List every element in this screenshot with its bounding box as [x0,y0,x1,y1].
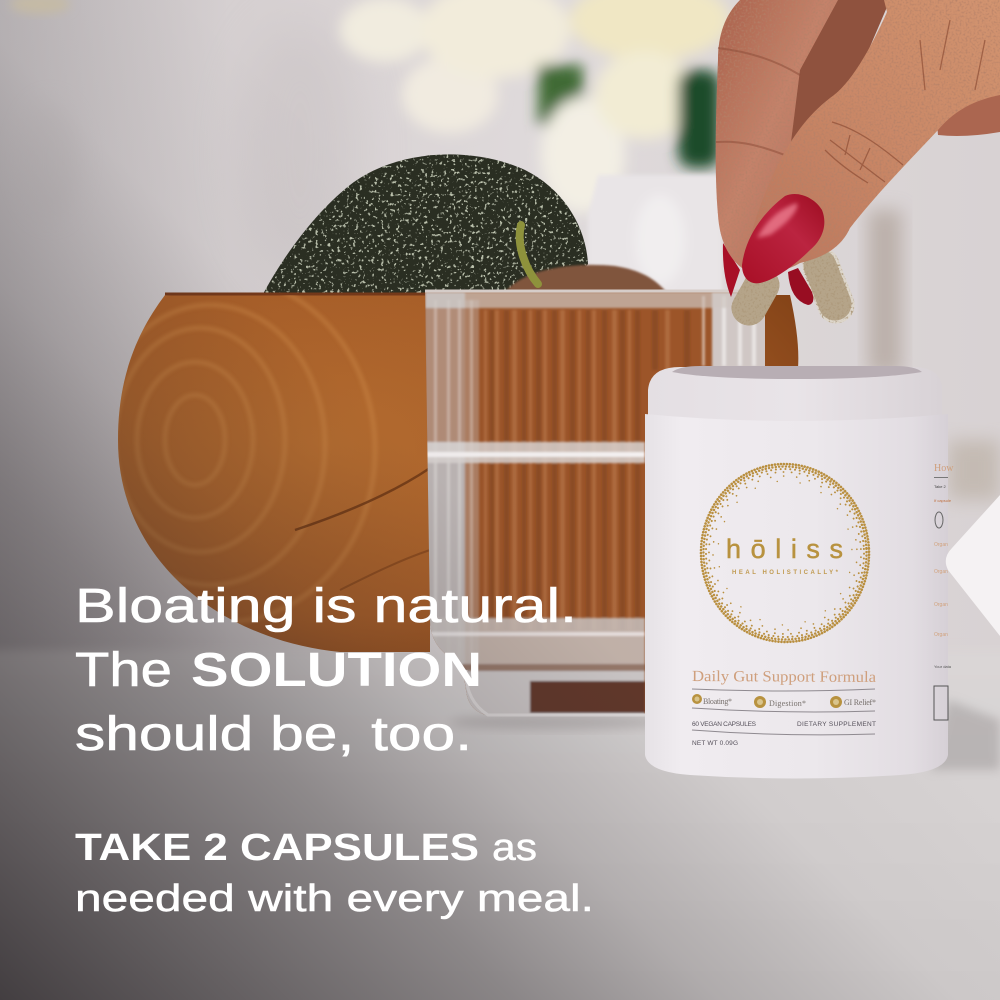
middle finger [760,0,890,225]
decorative stem behind the hand [868,210,902,375]
thumb fingernail [742,194,824,283]
jar shadow [930,700,1000,770]
side panel label text: Your data [934,664,952,669]
hand with capsules [716,0,1000,308]
thumb [742,0,1000,272]
thumb knuckle creases [825,20,985,183]
capsule count and supplement type [692,721,876,747]
brand name: hōliss [726,534,843,564]
avocado [262,154,588,296]
product name: Daily Gut Support Formula [692,668,876,686]
dosage instructions: needed with every meal. [75,878,594,920]
side panel label text: Organ [934,542,948,548]
dosage instructions [75,827,594,920]
table [0,650,1000,1000]
capsule count and supplement type: DIETARY SUPPLEMENT [797,721,876,728]
index finger [716,0,838,270]
white vase [588,175,722,300]
headline: should be, too. [75,708,472,761]
headline: The [75,644,172,697]
side panel label text [934,463,954,720]
lower palm [935,85,1000,136]
benefit icons: Digestion* [769,699,806,708]
capsule right [820,266,836,305]
back fingernails [723,243,813,305]
white paper corner [946,495,1000,636]
dosage instructions: TAKE 2 CAPSULES [75,827,479,869]
side panel label text: Take 2 [934,484,947,489]
headline: Bloating is natural. [75,580,577,633]
supplement jar [645,366,954,778]
headline: SOLUTION [191,644,482,697]
ribbed glass of water [425,291,767,719]
side panel label text: Organ [934,602,948,608]
side panel label text: Organ [934,569,948,575]
fruit and green stem [505,225,668,294]
rule lines [692,689,875,735]
benefit icons [692,694,876,708]
side panel label text: If capsule [934,498,952,503]
jar body [645,414,948,778]
jar lid [648,366,942,425]
background wall [0,0,1000,720]
tagline: HEAL HOLISTICALLY* [732,570,839,576]
headline [75,580,577,761]
benefit icons: Bloating* [703,697,732,706]
capsule count and supplement type: NET WT 0.09G [692,740,738,747]
capsule left [749,285,762,308]
capsule count and supplement type: 60 VEGAN CAPSULES [692,721,757,728]
side panel label text: Organ [934,632,948,638]
benefit icons: GI Relief* [844,698,876,707]
gold dotted ring [696,460,874,646]
side panel label text: How [934,463,954,474]
blurred flowers [340,0,730,213]
wooden bowl [75,278,798,652]
dosage instructions: as [492,827,537,869]
table shadow under glass and jar [450,714,670,730]
